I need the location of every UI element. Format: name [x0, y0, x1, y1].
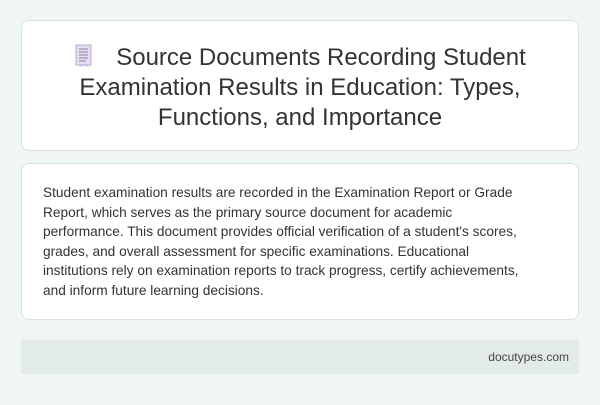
description panel: [21, 163, 579, 320]
description text: [43, 185, 518, 298]
description text: performance. This document provides official verification of a student's scores,: [43, 224, 517, 239]
icon: document: [76, 44, 92, 67]
title: Source Documents Recording Student Examination Results in Education: Types, Functions, and Importance: [79, 44, 526, 131]
description text: and inform future learning decisions.: [43, 282, 264, 298]
title panel: [21, 20, 579, 151]
footer bar: [21, 340, 579, 374]
footer text: docutypes.com: [488, 350, 569, 364]
description text: Report, which serves as the primary source document for academic: [43, 204, 452, 220]
description text: grades, and overall assessment for specific examinations. Educational: [43, 244, 469, 258]
description text: institutions rely on examination reports to track progress, certify achievements,: [43, 263, 518, 278]
description text: Student examination results are recorded in the Examination Report or Grade: [43, 185, 512, 200]
